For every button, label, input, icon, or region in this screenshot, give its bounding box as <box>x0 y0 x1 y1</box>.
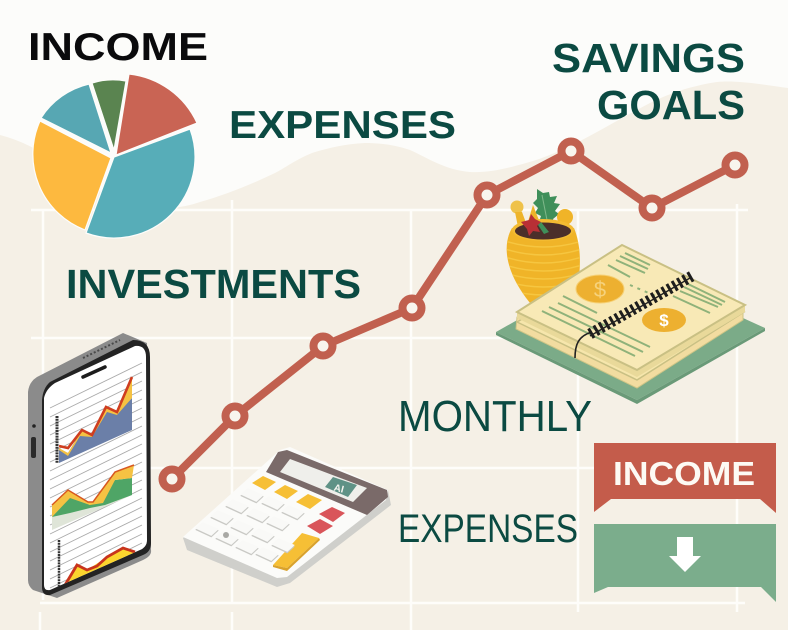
icon: calculator: AI <box>332 483 345 496</box>
label: expenses: EXPENSES <box>398 507 578 551</box>
heading: income: INCOME <box>28 26 208 69</box>
icon: stacked ledger books <box>496 245 765 404</box>
chart grid <box>31 200 748 630</box>
icon: smartphone with charts <box>28 333 151 598</box>
icon: calculator <box>183 447 391 587</box>
line chart <box>162 142 744 488</box>
banner: income: INCOME <box>613 455 755 492</box>
background top sky band <box>0 0 788 208</box>
heading: investments: INVESTMENTS <box>66 261 361 307</box>
banner: income <box>594 443 776 513</box>
icon: stacked ledger books: $ <box>594 277 606 302</box>
pie chart <box>33 74 197 238</box>
label: monthly: MONTHLY <box>398 392 592 441</box>
icon: stacked ledger books: $ <box>659 311 669 330</box>
heading: expenses: EXPENSES <box>229 104 456 147</box>
icon: potted plant <box>505 189 582 303</box>
banner: down arrow <box>594 524 776 602</box>
heading: savings goals: SAVINGS <box>552 35 745 81</box>
heading: savings goals <box>552 35 745 128</box>
heading: savings goals: GOALS <box>597 82 745 128</box>
